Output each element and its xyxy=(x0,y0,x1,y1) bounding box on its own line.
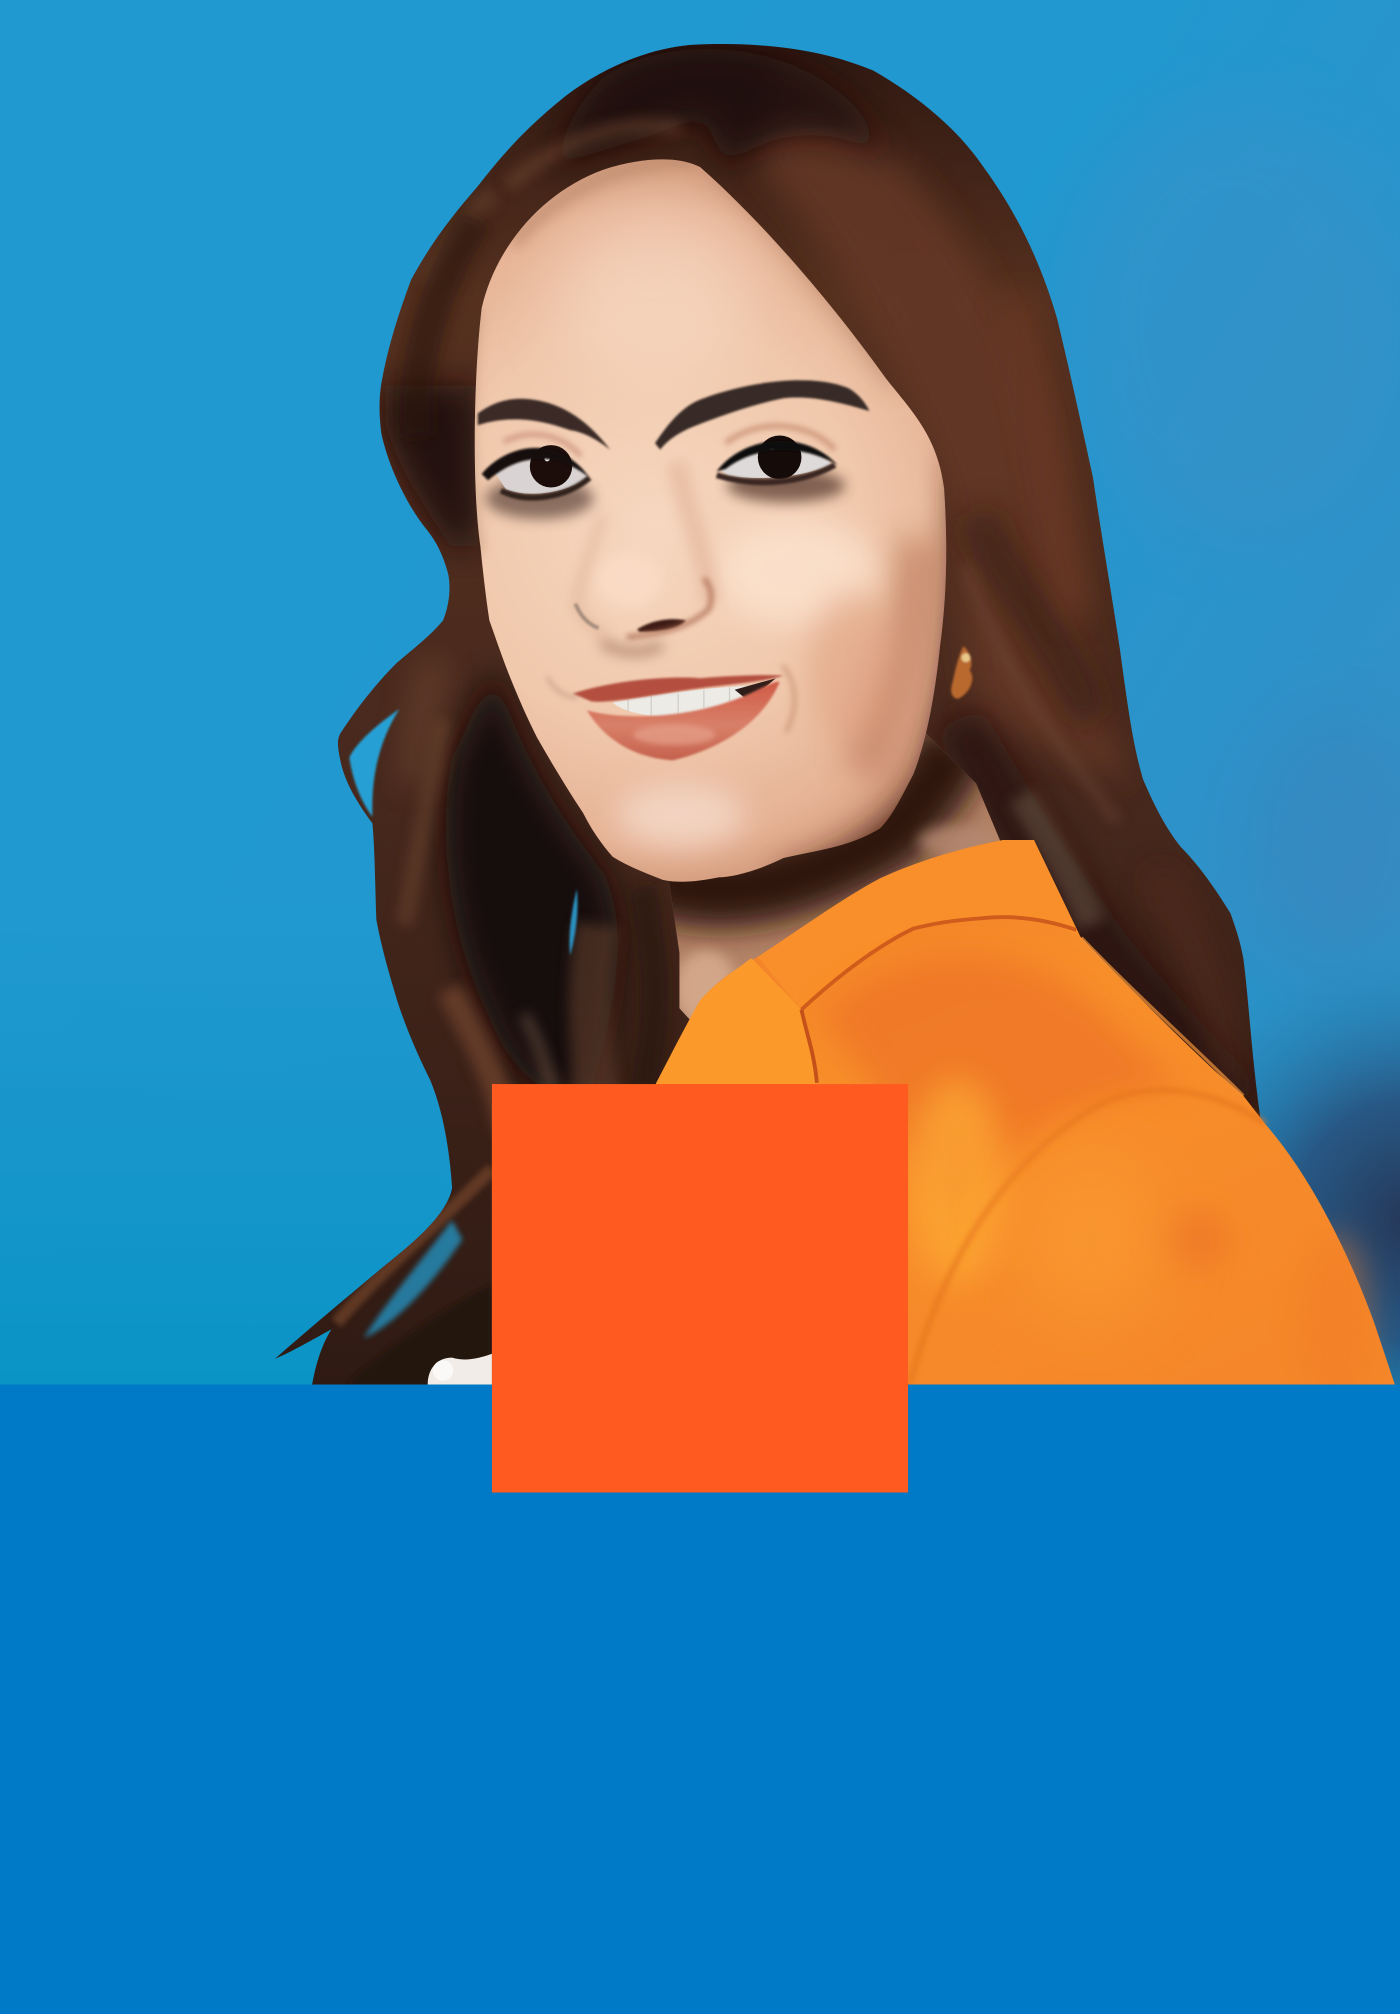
eyebrow: right xyxy=(655,380,870,450)
portrait illustration with colour panels xyxy=(0,0,1400,1492)
hair: curl gap xyxy=(349,709,399,817)
shirt: folds and sheen xyxy=(830,957,1162,1155)
hair: left curl highlights xyxy=(414,661,437,784)
neck xyxy=(669,734,1000,1020)
earring xyxy=(951,646,972,699)
nose xyxy=(575,514,711,652)
hair: right strand shadows and highlights xyxy=(957,719,1239,1105)
hair xyxy=(257,26,1284,1387)
hair: crown and right side tones xyxy=(758,77,1130,784)
face xyxy=(474,159,974,882)
eyebrow: left xyxy=(478,399,610,450)
hair: tail gap xyxy=(363,1220,462,1338)
mouth xyxy=(547,665,794,760)
pearl collar xyxy=(428,1354,492,1385)
hair: slit near neck xyxy=(569,889,578,956)
photo panel xyxy=(0,0,1400,1413)
shirt xyxy=(492,840,1395,1413)
shirt: collar seam xyxy=(801,917,1076,1010)
eye: left xyxy=(482,434,593,519)
hair: lower wisps xyxy=(337,1169,492,1323)
shirt: collar xyxy=(758,840,1080,990)
eye: right xyxy=(717,426,845,502)
face shading xyxy=(468,141,1028,925)
orange square xyxy=(492,1084,908,1493)
hair: dark lower left mass xyxy=(446,668,618,1095)
photo backdrop xyxy=(0,0,1400,1385)
blue band xyxy=(0,1385,1400,2014)
